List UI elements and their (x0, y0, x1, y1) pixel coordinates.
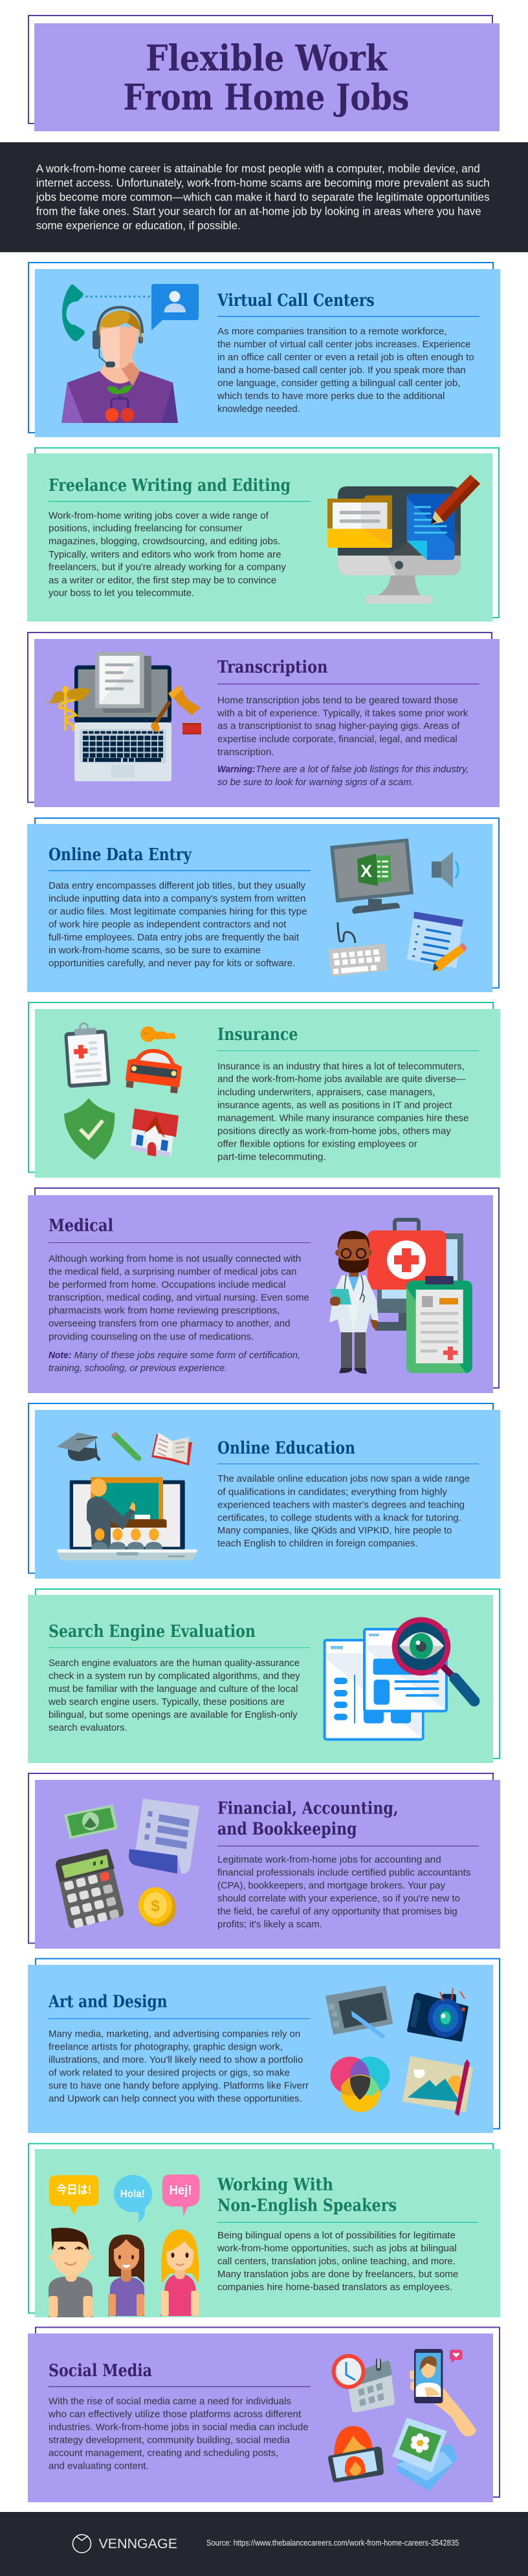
body text: the field, be careful of any opportunity that promises big (217, 1906, 457, 1917)
body text: providing counseling on the use of medications. (49, 1331, 254, 1342)
panel: Art and Design (28, 1958, 500, 2133)
panel: Medical (28, 1188, 499, 1393)
body text (49, 510, 286, 599)
body text: bilingual, but some openings are available for English-only (49, 1709, 298, 1720)
title block: Flexible Work (146, 37, 388, 79)
icon: call center agent (61, 284, 199, 423)
icon: calendar, phone, selfie and photos (328, 2349, 476, 2491)
body text: Search engine evaluators are the human quality-assurance (49, 1658, 300, 1669)
body text (217, 1854, 471, 1930)
body text: and Upwork can help connect you with these opportunities. (49, 2093, 302, 2104)
heading (217, 1799, 399, 1839)
icon: speech bubbles and three people (49, 2174, 200, 2317)
intro band (0, 142, 528, 252)
body text: the number of virtual call center jobs increases. Experience (217, 339, 471, 350)
panel: Transcription (28, 633, 500, 807)
body text: your boss to let you telecommute. (49, 588, 194, 599)
body text: knowledge needed. (217, 404, 300, 415)
heading: Online Data Entry (49, 845, 192, 865)
intro band: some experience or education, if possible. (36, 219, 241, 232)
body text: expertise include corporate, financial, legal, and medical (217, 733, 457, 744)
intro band: internet access. Unfortunately, work-from-home scams are becoming more prevalent as such (36, 176, 490, 189)
heading: Art and Design (48, 1992, 168, 2011)
icon: cap, pencil, book and virtual classroom (56, 1432, 197, 1560)
body text (217, 1061, 468, 1162)
body text: (CPA), bookkeepers, and mortgage brokers. Your pay (217, 1880, 445, 1891)
body text: Home transcription jobs tend to be geared toward those (217, 695, 458, 706)
body text: training, schooling, or previous experience. (49, 1363, 227, 1374)
panel: Financial, Accounting, and Bookkeeping (28, 1773, 500, 1949)
body text: transcription, medical coding, and virtual nursing. Even some (49, 1292, 309, 1303)
body text: financial professionals include certified public accountants (217, 1867, 471, 1878)
body text: pharmacists work from home reviewing prescriptions, (49, 1305, 280, 1316)
body text: strategy development, community building, social media (49, 2434, 291, 2445)
panel: Online Data Entry (27, 818, 499, 992)
body text: as a writer or editor, the first step may be to convince (49, 575, 276, 586)
icon: speech bubbles and three people: 今日は! (56, 2183, 91, 2196)
body text: and evaluating content. (49, 2460, 149, 2471)
body text: should correlate with your experience, so if you're new to (217, 1893, 460, 1904)
body text: Warning: (217, 764, 256, 775)
body text: so be sure to look for warning signs of a scam. (217, 777, 414, 788)
panel: Freelance Writing and Editing (27, 448, 499, 622)
intro band: A work-from-home career is attainable for most people with a computer, mobile device, and (36, 162, 480, 175)
body text: of work hire people as independent contractors and not (49, 919, 287, 930)
icon: web pages under magnifying glass: www (368, 1632, 379, 1638)
body text: positions, including freelancing for consumer (49, 523, 243, 534)
body text: work-from-home opportunities, such as jobs at bilingual (217, 2243, 457, 2254)
body text (48, 1658, 300, 1733)
body text: Work-from-home writing jobs cover a wide range of (49, 510, 269, 521)
icon: clipboard, key, car, shield and house (63, 1022, 184, 1160)
panel: Online Education (28, 1403, 500, 1579)
heading: Financial, Accounting, (217, 1799, 399, 1819)
body text: insurance agents, as well as positions in IT and project (217, 1099, 452, 1111)
body text: including underwriters, appraisers, case managers, (217, 1087, 435, 1098)
heading: Search Engine Evaluation (49, 1622, 256, 1641)
body text: sure to have one handy before applying. Platforms like Fiverr (49, 2080, 309, 2091)
icon: web pages under magnifying glass (325, 1620, 474, 1740)
intro band: jobs become more common—which can make it hard to separate the legitimate opportunities (36, 190, 490, 203)
body text: teach English to children in foreign companies. (217, 1538, 418, 1549)
heading: and Bookkeeping (217, 1820, 357, 1839)
body text: or audio files. Most legitimate companies hiring for this type (49, 906, 307, 917)
title block: From Home Jobs (123, 76, 409, 118)
icon: money, receipt, calculator and coin (56, 1799, 199, 1928)
body text: check in a system run by complicated algorithms, and they (49, 1671, 300, 1682)
source: Source: https://www.thebalancecareers.com/work-from-home-careers-3542835 (206, 2538, 459, 2548)
body text: Note: (49, 1350, 71, 1361)
body text: With the rise of social media came a need for individuals (49, 2396, 291, 2407)
body text: which tends to have more perks due to the additional (217, 391, 445, 402)
panel: Search Engine Evaluation (28, 1589, 500, 1763)
body text: land a home-based call center job. If you speak more than (217, 365, 466, 376)
body text: freelancers, but if you're already working for a company (49, 562, 286, 573)
body text: Many translation jobs are done by freelancers, but some (217, 2269, 458, 2280)
body text: as a transcriptionist to snag higher-paying gigs. Areas of (217, 720, 460, 731)
body text: Many of these jobs require some form of certification, (74, 1350, 300, 1361)
body text: Although working from home is not usually connected with (49, 1253, 301, 1264)
icon: Venngage logo (72, 2535, 91, 2553)
body text: full-time employees. Data entry jobs are frequently the bait (49, 932, 300, 943)
body text: in work-from-home scams, so be sure to examine (49, 945, 261, 956)
heading: Medical (49, 1216, 113, 1235)
heading: Insurance (217, 1025, 298, 1044)
body text (217, 2230, 458, 2293)
intro band: from the fake ones. Start your search for an at-home job by looking in areas where you have (36, 205, 481, 218)
body text: overseeing transfers from one pharmacy to another, and (49, 1318, 291, 1329)
panel: Virtual Call Centers (28, 263, 500, 437)
body text: who can effectively utilize those platforms across different (48, 2408, 302, 2419)
heading: Online Education (217, 1438, 355, 1458)
icon: laptop, document, caduceus and gavel (45, 652, 201, 781)
body text: positions directly as work-from-home jobs, others may (217, 1125, 451, 1137)
body text: illustrations, and more. You'll likely need to show a portfolio (49, 2054, 303, 2065)
body text: experienced teachers with master's degrees and teaching (217, 1499, 465, 1511)
heading: Working With (217, 2176, 333, 2195)
body text: search evaluators. (49, 1722, 127, 1733)
body text: with a bit of experience. Typically, it takes some prior work (217, 708, 468, 719)
body text (217, 326, 474, 415)
body text: Insurance is an industry that hires a lot of telecommuters, (217, 1061, 465, 1072)
body text: the medical field, a surprising number of medical jobs can (49, 1266, 296, 1277)
heading: Freelance Writing and Editing (49, 476, 291, 495)
body text: part-time telecommuting. (217, 1151, 326, 1162)
panel: Insurance (28, 1002, 500, 1178)
title block (28, 16, 500, 131)
icon: drawing tablet, camera, colour venn and picture (325, 1986, 473, 2116)
body text: Legitimate work-from-home jobs for accounting and (217, 1854, 441, 1865)
body text (217, 1473, 470, 1549)
icon: monitor with folder and document (327, 475, 480, 603)
body text: As more companies transition to a remote workforce, (217, 326, 447, 337)
icon: monitor, speaker, keyboard and notepad (329, 838, 467, 977)
body text (49, 1253, 309, 1374)
body text: call centers, translation jobs, online teaching, and more. (217, 2256, 456, 2267)
body text (48, 2396, 309, 2471)
body text (49, 880, 307, 969)
body text: include inputting data into a company's system from written (49, 893, 305, 904)
heading: Transcription (217, 658, 327, 677)
body text: of work related to your desired projects or gigs, so make (49, 2067, 290, 2078)
icon: money, receipt, calculator and coin: $ (151, 1897, 160, 1915)
body text: Data entry encompasses different job titles, but they usually (49, 880, 305, 891)
body text: Many media, marketing, and advertising companies rely on (49, 2028, 300, 2039)
body text: Being bilingual opens a lot of possibilities for legitimate (217, 2230, 456, 2241)
logo wordmark: VENNGAGE (98, 2537, 177, 2551)
body text: companies hire home-based translators as employees. (217, 2282, 452, 2293)
icon: speech bubbles and three people: Hej! (170, 2183, 192, 2198)
body text: The available online education jobs now span a wide range (217, 1473, 470, 1484)
body text: in an office call center or even a retail job is often enough to (217, 352, 474, 363)
body text: Typically, writers and editors who work from home are (49, 549, 281, 560)
body text: be performed from home. Occupations include medical (49, 1279, 285, 1290)
icon: monitor, speaker, keyboard and notepad: X (360, 861, 372, 881)
body text: account management, creating and scheduling posts, (49, 2447, 278, 2458)
body text: one language, consider getting a bilingual call center job, (217, 378, 460, 389)
icon: web pages under magnifying glass: www (330, 1644, 344, 1651)
body text: opportunities carefully, and never pay for kits or software. (49, 958, 295, 969)
body text: profits; it's likely a scam. (217, 1919, 322, 1930)
body text (217, 695, 468, 788)
body text (49, 2028, 309, 2104)
panel: Working With Non-English Speakers (28, 2143, 500, 2317)
heading: Virtual Call Centers (217, 291, 375, 310)
body text: must be familiar with the language and culture of the local (49, 1683, 298, 1694)
body text: Many companies, like QKids and VIPKID, hire people to (217, 1525, 452, 1536)
body text: management. While many insurance companies hire these (217, 1112, 468, 1123)
body text: industries. Work-from-home jobs in social media can include (49, 2421, 309, 2432)
body text: and the work-from-home jobs available are quite diverse— (217, 1074, 466, 1085)
body text: certificates, to college students with a knack for tutoring. (217, 1512, 461, 1523)
body text: freelance artists for photography, graphic design work, (49, 2041, 283, 2052)
heading (217, 2176, 397, 2215)
icon: speech bubbles and three people: Hola! (120, 2188, 145, 2200)
body text: offer flexible options for existing employees or (217, 1138, 417, 1149)
footer (0, 2512, 528, 2576)
body text: transcription. (217, 746, 274, 758)
body text: of qualifications in candidates; everything from highly (217, 1486, 448, 1497)
panel: Social Media (28, 2327, 500, 2502)
heading: Non-English Speakers (217, 2196, 397, 2215)
body text: magazines, blogging, crowdsourcing, and editing jobs. (49, 536, 281, 547)
icon: doctor, medical kit and clipboard (329, 1220, 472, 1374)
body text: There are a lot of false job listings for this industry, (256, 764, 468, 775)
body text: web search engine users. Typically, these positions are (48, 1696, 285, 1707)
heading: Social Media (49, 2361, 152, 2381)
